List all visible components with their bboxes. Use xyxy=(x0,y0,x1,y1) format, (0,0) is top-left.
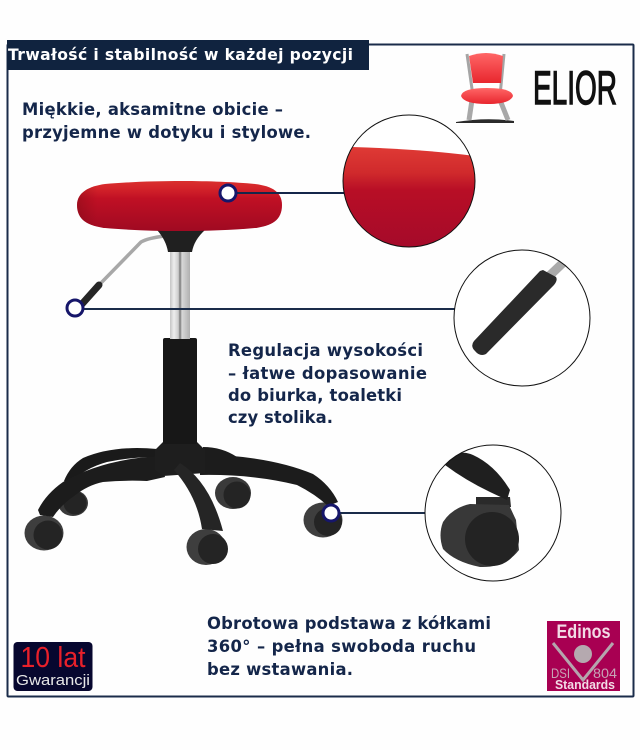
detail circle: upholstery xyxy=(340,115,480,250)
front casters xyxy=(24,502,342,565)
callout line: seat xyxy=(236,192,344,194)
text: swivel base: 360° – pełna swoboda ruchu xyxy=(207,637,476,656)
badge: Edinos standards xyxy=(547,621,620,692)
text: swivel base: bez wstawania. xyxy=(207,660,353,679)
badge: Edinos standards: 804 xyxy=(593,665,617,681)
detail circle: caster xyxy=(425,445,561,581)
logo: chair icon xyxy=(456,53,514,123)
front legs xyxy=(38,456,165,517)
hub and column xyxy=(155,442,205,476)
detail circle: lever grip xyxy=(454,250,590,386)
title bar: Trwałość i stabilność w każdej pozycji xyxy=(8,46,353,64)
text: swivel base: Obrotowa podstawa z kółkami xyxy=(207,614,491,633)
marker: caster xyxy=(323,505,339,521)
badge: Edinos standards: DSI xyxy=(551,665,570,681)
badge: 10 years warranty xyxy=(14,642,92,691)
badge: 10 years warranty: 10 lat xyxy=(20,642,86,674)
neck xyxy=(157,230,205,252)
text: upholstery: przyjemne w dotyku i stylowe. xyxy=(22,123,311,142)
badge: Edinos standards: Standards xyxy=(555,678,615,692)
marker: lever xyxy=(67,300,83,316)
handle xyxy=(100,236,165,284)
chrome piston xyxy=(170,250,190,339)
text: height adjustment: Regulacja wysokości xyxy=(228,341,423,360)
callout line: caster xyxy=(338,512,426,514)
text: height adjustment: do biurka, toaletki xyxy=(228,386,402,405)
marker: seat xyxy=(220,185,236,201)
badge: Edinos standards: Edinos xyxy=(556,622,610,643)
title bar xyxy=(7,40,369,70)
text: height adjustment: – łatwe dopasowanie xyxy=(228,364,427,383)
stool xyxy=(24,181,342,565)
back legs xyxy=(64,448,158,484)
seat xyxy=(77,181,282,231)
text: height adjustment: czy stolika. xyxy=(228,408,333,427)
callout line: lever xyxy=(82,308,455,310)
badge: 10 years warranty: Gwarancji xyxy=(16,672,90,689)
back casters xyxy=(58,477,251,516)
text: upholstery: Miękkie, aksamitne obicie – xyxy=(22,100,283,119)
